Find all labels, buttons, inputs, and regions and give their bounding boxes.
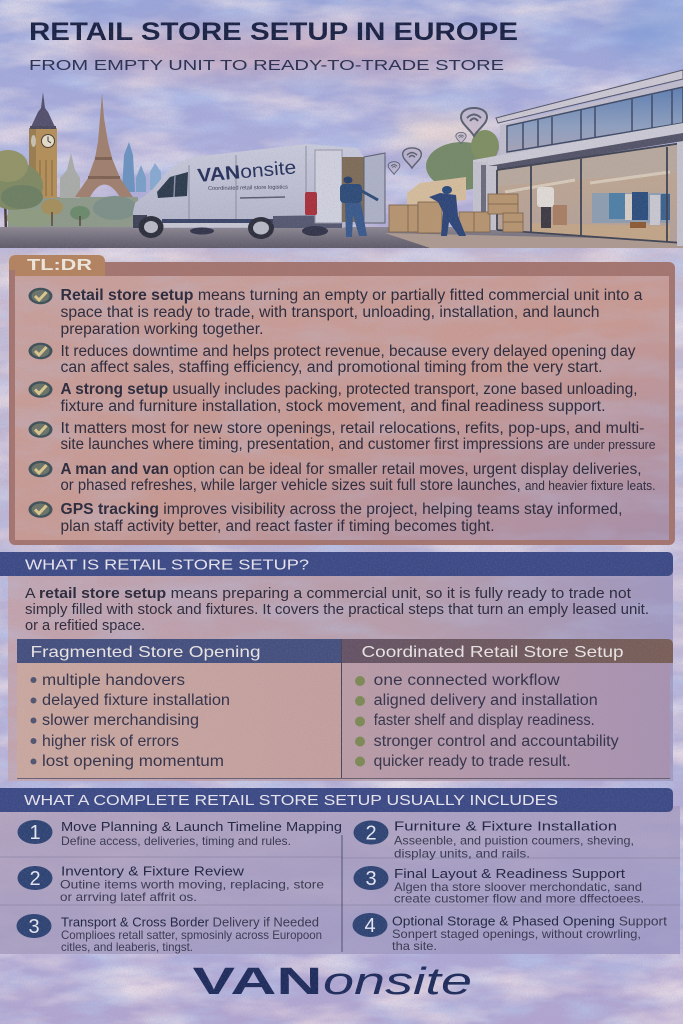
- rear door: [315, 150, 342, 223]
- item: reduces downtime: can affect sales, staffing efficiency, and promotional timing from the very start.: [60, 359, 602, 376]
- icon: church spire: [60, 153, 80, 198]
- tab label: TL:DR: [27, 257, 92, 274]
- open door: [364, 153, 385, 223]
- item: GPS tracking: GPS tracking improves visibility across the project, helping teams stay informed,: [60, 501, 622, 518]
- section heading bar: WHAT IS RETAIL STORE SETUP?: [25, 558, 309, 574]
- item: strong setup: fixture and furniture installation, stock movement, and final readiness support.: [60, 398, 606, 415]
- icon: right tree behind van: [426, 130, 499, 190]
- item: reduces downtime: [28, 343, 636, 376]
- panel background: [8, 570, 673, 781]
- comparison: fragmented store opening: slower merchandising: [42, 712, 199, 729]
- hero illustration: [0, 0, 683, 248]
- clothes rack: [592, 192, 670, 225]
- fascia: [473, 123, 683, 168]
- comparison: fragmented store opening: lost opening momentum: [42, 753, 224, 770]
- worker pushing boxes: [429, 186, 466, 236]
- step: inventory review: or arrving latef affrit os.: [60, 890, 197, 904]
- panel: TL:DR: [9, 255, 675, 545]
- definition text: simply filled with stock and fixtures. It covers the practical steps that turn an emply leased unit.: [25, 601, 649, 618]
- step: inventory review: 2: [29, 868, 41, 890]
- step: final layout: Algen tha store sloover merchondatic, sand: [394, 880, 642, 894]
- glazing: [497, 143, 683, 242]
- step: move planning: 1: [29, 822, 41, 844]
- step: final layout: 3: [365, 868, 377, 890]
- comparison: fragmented store opening: higher risk of errors: [42, 733, 179, 750]
- ground: [0, 227, 683, 248]
- step: final layout: [354, 866, 644, 906]
- van: [133, 144, 385, 239]
- comparison: coordinated retail store setup: [342, 639, 673, 778]
- step: final layout: create customer flow and more dffectoees.: [394, 892, 644, 906]
- item: retail store setup: preparation working together.: [60, 321, 264, 338]
- definition text: [25, 585, 649, 634]
- comparison: fragmented store opening: Fragmented Store Opening: [30, 644, 260, 661]
- icon: left tree: [0, 150, 43, 233]
- comparison: coordinated retail store setup: Coordinated Retail Store Setup: [362, 644, 624, 661]
- panel background: [0, 806, 680, 954]
- step: furniture installation: 2: [365, 822, 377, 844]
- comparison: coordinated retail store setup: aligned delivery and installation: [374, 692, 598, 709]
- icon: blue city towers: [122, 142, 161, 192]
- step: optional storage: tha site.: [392, 939, 437, 953]
- comparison: coordinated retail store setup: faster shelf and display readiness.: [374, 712, 595, 729]
- step: transport: Complioes retall satter, spmosinly across Europoon: [61, 928, 322, 942]
- icon: Eiffel tower: [75, 93, 133, 197]
- step: optional storage: Optional Storage & Phased Opening Support: [392, 914, 667, 928]
- logo: VANonsite: [192, 961, 472, 1003]
- step: optional storage: 4: [364, 915, 376, 937]
- item: man and van: or phased refreshes, while larger vehicle sizes suit full store launches, and heavier fixture leats.: [60, 477, 656, 494]
- mannequin: [537, 187, 567, 228]
- item: retail store setup: space that is ready to trade, with transport, unloading, installation, and launch: [60, 304, 600, 321]
- logo: VANonsite: VAN: [192, 961, 322, 1003]
- step: inventory review: Inventory & Fixture Review: [61, 864, 245, 878]
- frames: [497, 143, 683, 243]
- definition text: or a refitied space.: [25, 617, 145, 634]
- item: when it matters: It matters most for new store openings, retail relocations, refits, pop-ups, and multi-: [60, 420, 644, 437]
- step: move planning: [18, 819, 342, 848]
- roof and upper wall: [500, 80, 683, 165]
- boxes and trolleys: [389, 194, 523, 233]
- tab label: [9, 255, 105, 276]
- step: furniture installation: Asseenble, and puistion coumers, sheving,: [394, 834, 634, 848]
- step: move planning: Define access, deliveries, timing and rules.: [61, 834, 291, 848]
- item: when it matters: site launches where timing, presentation, and customer first impressions are under pressure: [60, 436, 656, 453]
- icon: Big Ben tower: [29, 92, 57, 198]
- comparison: coordinated retail store setup: stronger control and accountability: [374, 733, 619, 750]
- comparison: coordinated retail store setup: one connected workflow: [374, 672, 561, 689]
- section heading bar: [0, 552, 673, 576]
- step: transport: citles, and leaberis, tingst.: [61, 940, 193, 954]
- panel: what is retail store setup: [0, 552, 673, 781]
- tail light: [305, 192, 317, 215]
- title: RETAIL STORE SETUP IN EUROPE: [29, 18, 518, 46]
- step: furniture installation: display units, and rails.: [394, 846, 530, 860]
- floor: [531, 223, 670, 241]
- interior: [342, 157, 364, 222]
- item: when it matters: [28, 420, 656, 453]
- step: furniture installation: Furniture & Fixture Installation: [394, 818, 617, 834]
- wheels: [190, 228, 214, 234]
- step: inventory review: Outine items worth moving, replacing, store: [60, 878, 324, 892]
- section heading bar: [0, 788, 673, 812]
- logo: VANonsite: onsite: [323, 961, 472, 1003]
- comparison: coordinated retail store setup: quicker ready to trade result.: [374, 753, 571, 770]
- soft cloud glows: [70, 30, 530, 74]
- step: transport: 3: [28, 916, 40, 938]
- comparison: fragmented store opening: delayed fixture installation: [42, 692, 230, 709]
- comparison: fragmented store opening: multiple handovers: [42, 672, 185, 689]
- columns: [473, 162, 488, 228]
- definition text: A retail store setup means preparing a commercial unit, so it is fully ready to trade not: [25, 585, 632, 602]
- comparison: fragmented store opening: [17, 639, 341, 778]
- store front: [473, 70, 683, 246]
- item: retail store setup: Retail store setup means turning an empty or partially fitted commercial unit into a: [60, 287, 643, 304]
- step: optional storage: Sonpert staged openings, without crowrling,: [392, 927, 641, 941]
- van small print: Coordinated retail store logistics: [208, 185, 288, 192]
- step: optional storage: [352, 913, 667, 953]
- item: strong setup: [28, 381, 638, 415]
- step: transport: Transport & Cross Border Delivery if Needed: [61, 914, 319, 930]
- panel frame: [9, 262, 675, 545]
- item: reduces downtime: It reduces downtime and helps protect revenue, because every delayed opening day: [60, 343, 636, 360]
- clerestory windows: [507, 87, 683, 152]
- foliage strip: [6, 196, 138, 228]
- item: retail store setup: [28, 287, 643, 338]
- worker at van door: [340, 176, 378, 237]
- small park trees: [41, 199, 90, 226]
- item: strong setup: A strong setup usually includes packing, protected transport, zone based unloading,: [60, 381, 638, 398]
- item: man and van: [28, 461, 656, 494]
- item: GPS tracking: plan staff activity better, and react faster if timing becomes tight.: [60, 518, 494, 535]
- step: move planning: Move Planning & Launch Timeline Mapping: [61, 819, 342, 834]
- van logo: VANonsite: [197, 157, 297, 187]
- board behind boxes: [407, 177, 466, 205]
- step: inventory review: [18, 864, 324, 904]
- step: furniture installation: [354, 818, 634, 860]
- subtitle: FROM EMPTY UNIT TO READY-TO-TRADE STORE: [29, 57, 504, 74]
- step: final layout: Final Layout & Readiness Support: [394, 866, 625, 881]
- panel: what a complete setup includes: [0, 788, 680, 954]
- item: man and van: A man and van option can be ideal for smaller retail moves, urgent display deliveries,: [60, 461, 642, 478]
- icon: wifi location pins: [388, 108, 487, 174]
- step: transport: [16, 914, 322, 954]
- item: GPS tracking: [28, 501, 622, 535]
- section heading bar: WHAT A COMPLETE RETAIL STORE SETUP USUALLY INCLUDES: [24, 793, 558, 809]
